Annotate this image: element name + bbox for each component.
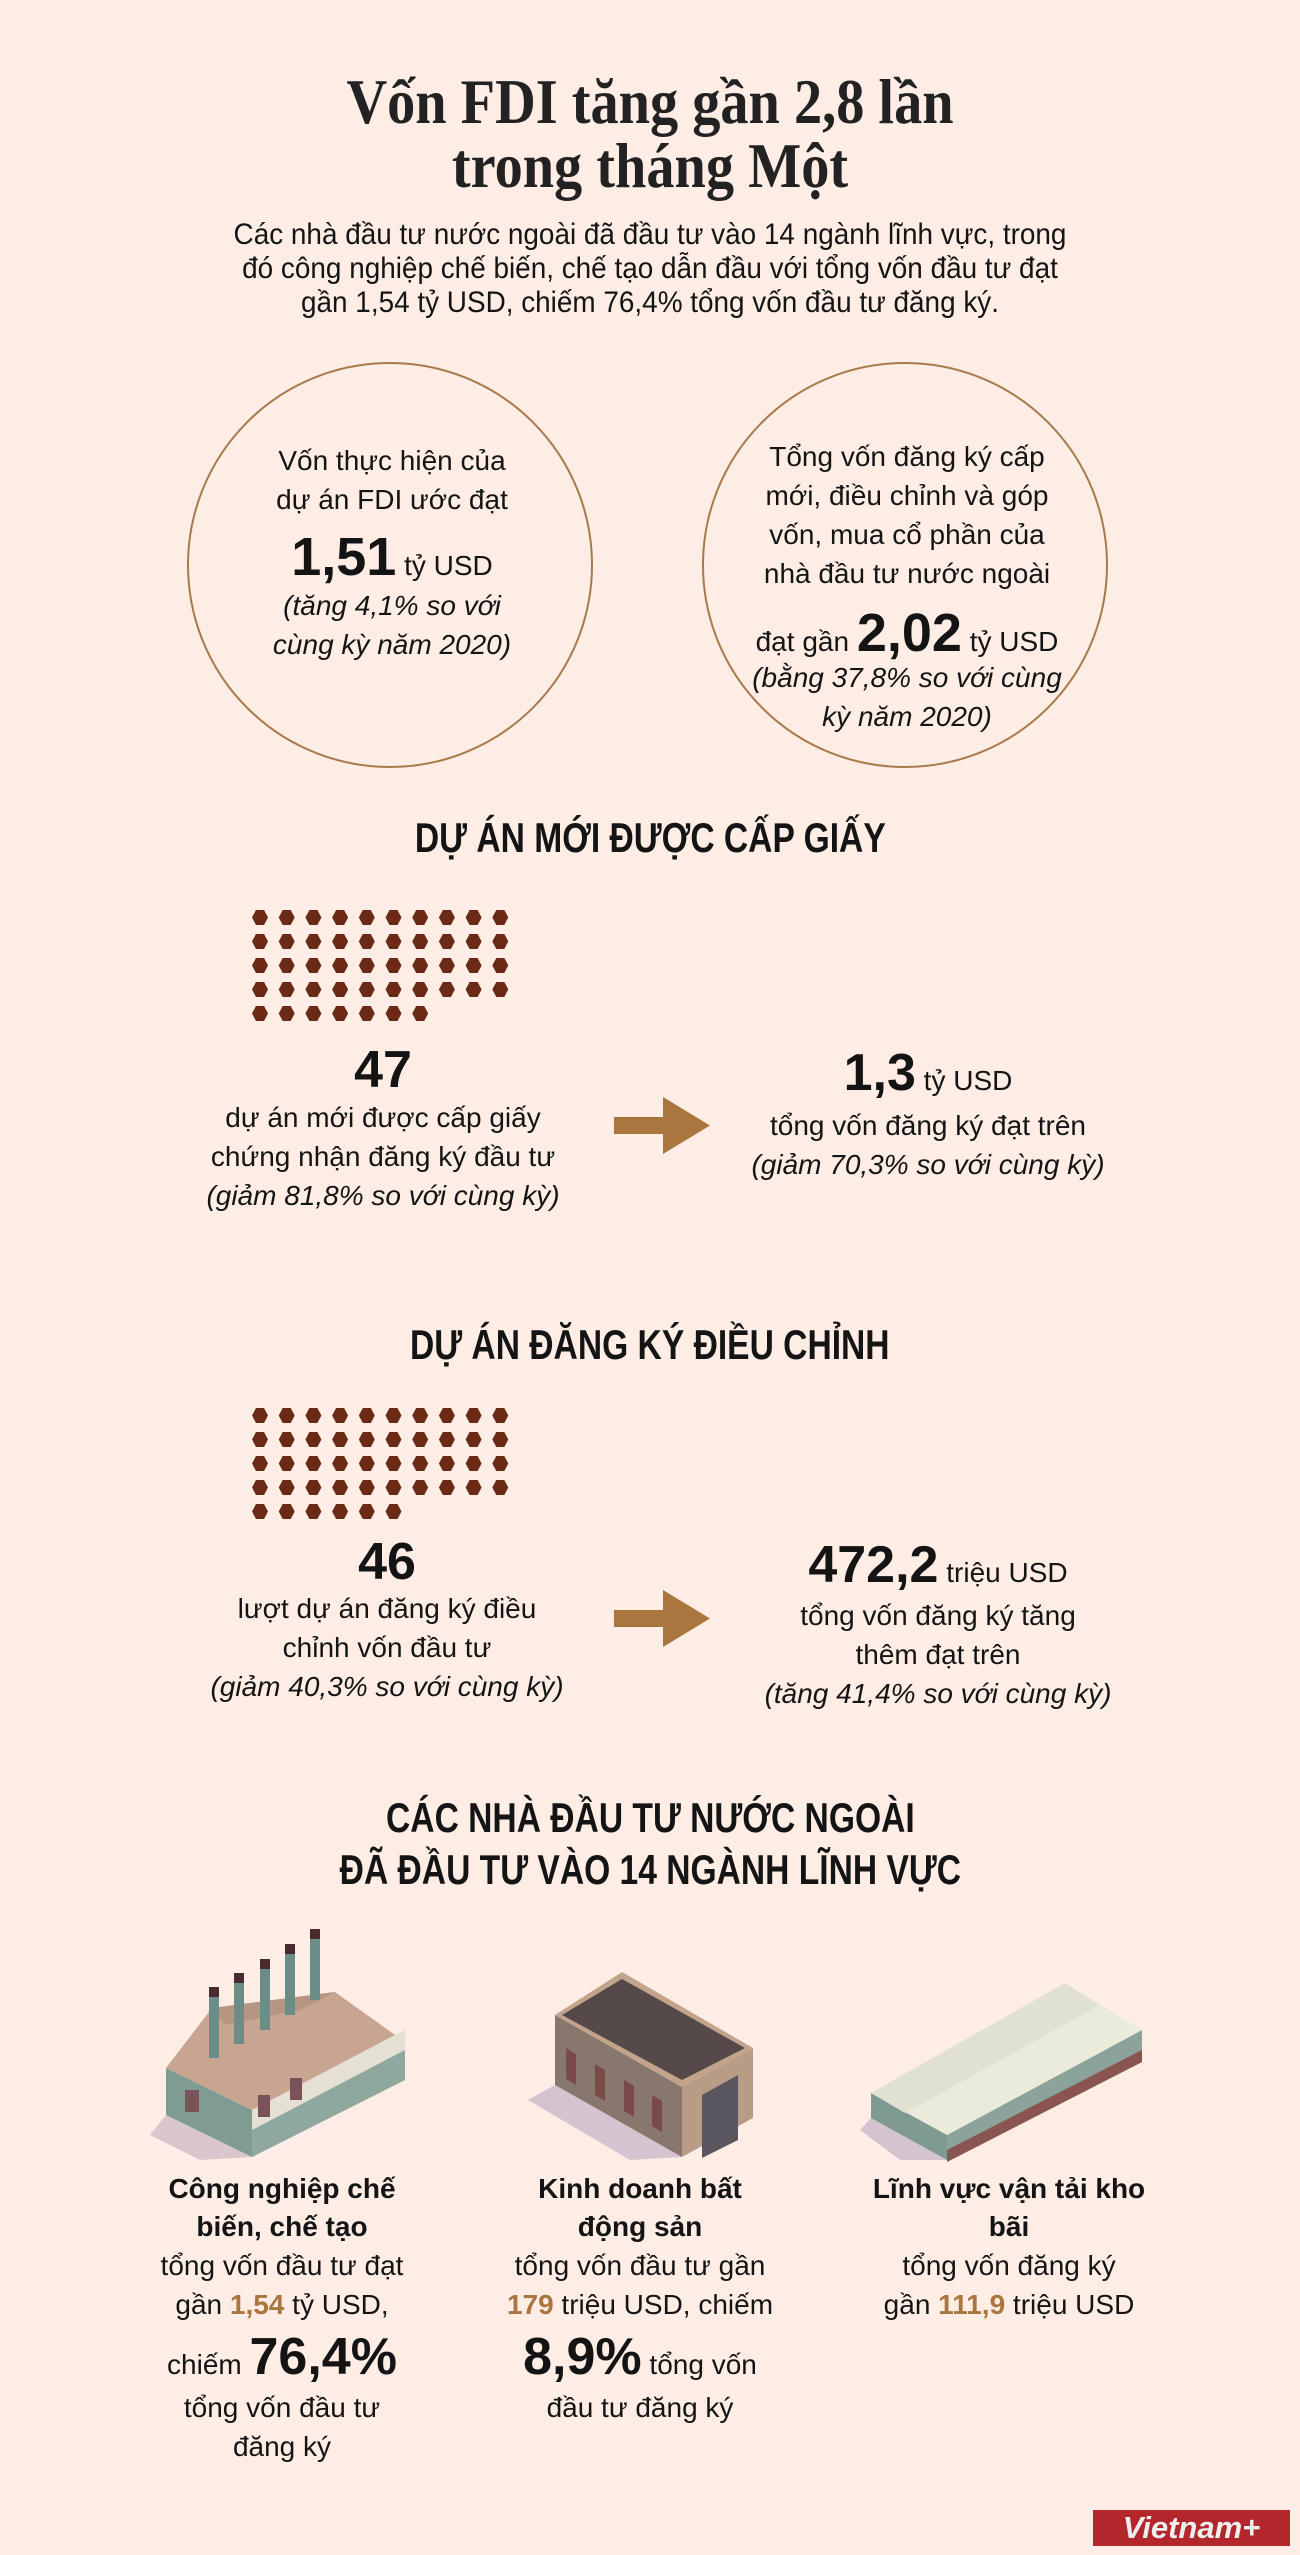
- circle: total registered capital: (bằng 37,8% so với cùng: [752, 662, 1062, 693]
- title: [346, 66, 954, 201]
- circle: total registered capital: nhà đầu tư nước ngoài: [764, 558, 1050, 589]
- sector: manufacturing: [160, 2173, 404, 2462]
- stat: 1.3 billion USD: (giảm 70,3% so với cùng kỳ): [751, 1149, 1105, 1180]
- sector: manufacturing: chiếm 76,4%: [167, 2328, 397, 2386]
- sector: real estate: 8,9% tổng vốn: [523, 2328, 757, 2386]
- stat: 46 adjusted projects: chỉnh vốn đầu tư: [283, 1632, 491, 1663]
- circle: total registered capital: đạt gần 2,02 tỷ USD: [756, 603, 1058, 663]
- stat: 472.2 million USD: [765, 1536, 1111, 1709]
- circle: total registered capital: Tổng vốn đăng ký cấp: [769, 441, 1045, 472]
- sector: manufacturing: tổng vốn đầu tư: [184, 2392, 380, 2423]
- stat: 46 adjusted projects: [210, 1533, 564, 1702]
- sector: manufacturing: gần 1,54 tỷ USD,: [175, 2289, 389, 2320]
- arrow: [614, 1590, 710, 1647]
- illustration: factory: [150, 1929, 405, 2160]
- circle: realized capital: (tăng 4,1% so với: [283, 590, 501, 621]
- stat: 47 new projects: dự án mới được cấp giấy: [225, 1102, 541, 1133]
- circle: total registered capital: [702, 362, 1108, 768]
- sector: manufacturing: đăng ký: [233, 2431, 331, 2462]
- sector: logistics: Lĩnh vực vận tải kho: [873, 2173, 1145, 2204]
- stat: 1.3 billion USD: [751, 1044, 1105, 1180]
- arrow: [614, 1097, 710, 1154]
- sector: manufacturing: biến, chế tạo: [196, 2211, 368, 2242]
- heading: 14 sectors: ĐÃ ĐẦU TƯ VÀO 14 NGÀNH LĨNH VỰC: [339, 1846, 961, 1893]
- stat: 47 new projects: (giảm 81,8% so với cùng kỳ): [206, 1180, 560, 1211]
- stat: 472.2 million USD: tổng vốn đăng ký tăng: [800, 1600, 1076, 1631]
- illustration: warehouse: [860, 1983, 1142, 2162]
- stat: 46 adjusted projects: 46: [358, 1533, 416, 1591]
- circle: realized capital: cùng kỳ năm 2020): [273, 629, 511, 660]
- sector: logistics: gần 111,9 triệu USD: [884, 2289, 1134, 2320]
- circle: total registered capital: kỳ năm 2020): [822, 701, 992, 732]
- heading: adjusted projects: DỰ ÁN ĐĂNG KÝ ĐIỀU CHỈNH: [410, 1321, 890, 1368]
- stat: 47 new projects: [206, 1041, 560, 1211]
- subtitle: [234, 218, 1066, 319]
- title: Vốn FDI tăng gần 2,8 lần: [346, 66, 954, 137]
- stat: 1.3 billion USD: tổng vốn đăng ký đạt trên: [770, 1110, 1086, 1141]
- title: trong tháng Một: [452, 130, 848, 201]
- subtitle: đó công nghiệp chế biến, chế tạo dẫn đầu với tổng vốn đầu tư đạt: [242, 252, 1058, 285]
- sector: real estate: động sản: [578, 2211, 702, 2242]
- sector: manufacturing: tổng vốn đầu tư đạt: [161, 2250, 403, 2281]
- circle: total registered capital: vốn, mua cổ phần của: [769, 519, 1045, 550]
- heading: 14 sectors: [339, 1794, 961, 1893]
- circle: total registered capital: mới, điều chỉnh và góp: [766, 480, 1048, 511]
- sector: real estate: [507, 2173, 773, 2423]
- sector: real estate: tổng vốn đầu tư gần: [515, 2250, 765, 2281]
- stat: 46 adjusted projects: lượt dự án đăng ký điều: [238, 1593, 536, 1624]
- sector: real estate: 179 triệu USD, chiếm: [507, 2289, 773, 2320]
- sector: real estate: Kinh doanh bất: [538, 2173, 742, 2204]
- sector: manufacturing: Công nghiệp chế: [168, 2173, 396, 2204]
- sector: real estate: đầu tư đăng ký: [547, 2392, 733, 2423]
- icon grid: 47 hexagons: [252, 910, 508, 1021]
- heading: 14 sectors: CÁC NHÀ ĐẦU TƯ NƯỚC NGOÀI: [386, 1794, 914, 1841]
- circle: realized capital: dự án FDI ước đạt: [276, 484, 508, 515]
- sector: logistics: bãi: [989, 2211, 1029, 2242]
- sector: logistics: [873, 2173, 1145, 2320]
- circle: realized capital: [187, 362, 593, 768]
- logo: Vietnam+: Vietnam+: [1123, 2510, 1260, 2545]
- stat: 47 new projects: chứng nhận đăng ký đầu tư: [211, 1141, 555, 1172]
- sector: logistics: tổng vốn đăng ký: [902, 2250, 1116, 2281]
- icon grid: 46 hexagons: [252, 1408, 508, 1519]
- illustration: office building: [528, 1972, 753, 2160]
- stat: 472.2 million USD: 472,2 triệu USD: [808, 1536, 1068, 1594]
- subtitle: Các nhà đầu tư nước ngoài đã đầu tư vào 14 ngành lĩnh vực, trong: [234, 218, 1066, 251]
- stat: 472.2 million USD: thêm đạt trên: [856, 1639, 1020, 1670]
- circle: realized capital: 1,51 tỷ USD: [291, 527, 493, 587]
- subtitle: gần 1,54 tỷ USD, chiếm 76,4% tổng vốn đầu tư đăng ký.: [301, 286, 999, 319]
- circle: realized capital: Vốn thực hiện của: [278, 445, 506, 476]
- heading: new projects: DỰ ÁN MỚI ĐƯỢC CẤP GIẤY: [415, 814, 885, 861]
- stat: 1.3 billion USD: 1,3 tỷ USD: [844, 1044, 1012, 1102]
- stat: 47 new projects: 47: [354, 1041, 412, 1099]
- logo: Vietnam+: [1093, 2510, 1290, 2546]
- stat: 46 adjusted projects: (giảm 40,3% so với cùng kỳ): [210, 1671, 564, 1702]
- stat: 472.2 million USD: (tăng 41,4% so với cùng kỳ): [765, 1678, 1111, 1709]
